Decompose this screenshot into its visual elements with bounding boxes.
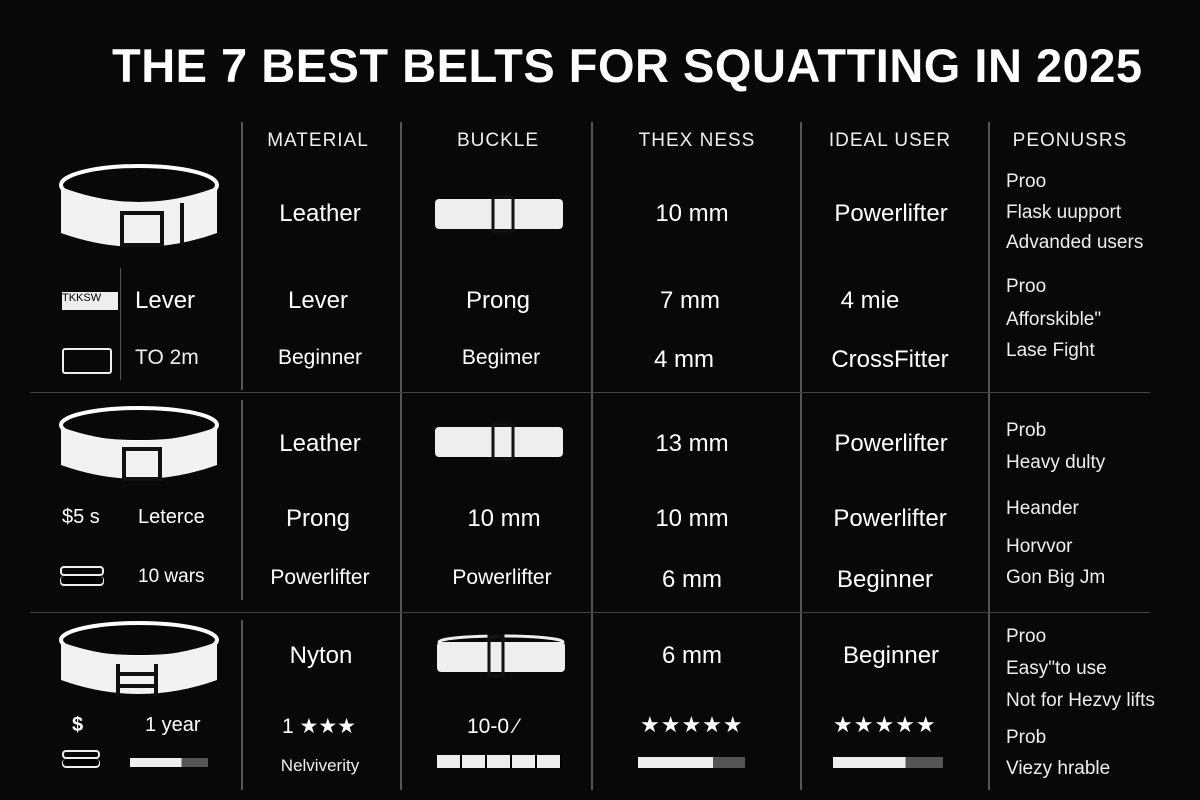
row 1 values xyxy=(62,171,1143,374)
row 1 values: TKKSW xyxy=(62,292,101,304)
text: Proo xyxy=(1006,171,1046,192)
row 3 values: 10-0 ⁄ xyxy=(467,715,518,738)
row 3 values: Beginner xyxy=(843,642,939,669)
row 2 values: Powerlifter xyxy=(452,566,552,589)
text: Proo xyxy=(1006,626,1046,647)
column headers: BUCKLE xyxy=(457,130,539,151)
row 1 values: Afforskible" xyxy=(1006,309,1101,330)
row 3 values: Viezy hrable xyxy=(1006,758,1110,779)
row 1 values: Lever xyxy=(135,287,195,314)
row 2 values: Heander xyxy=(1006,498,1079,519)
row 3 values: Not for Hezvy lifts xyxy=(1006,690,1155,711)
row 2 values: Heavy dulty xyxy=(1006,452,1105,473)
belt icon 3 xyxy=(59,621,219,696)
row 2 values: Prob xyxy=(1006,420,1046,441)
row 2 values: 6 mm xyxy=(662,566,722,593)
row 1 values: 10 mm xyxy=(655,200,729,227)
row 1 values: Prong xyxy=(466,287,530,314)
row 3 values: Nelviverity xyxy=(281,756,359,775)
row 2 values: Gon Big Jm xyxy=(1006,567,1105,588)
belt icon 1 xyxy=(59,164,219,247)
row 2 values: Powerlifter xyxy=(834,430,948,457)
row 3 values: ★★★★★ xyxy=(833,712,937,737)
row 2 values: Beginner xyxy=(837,566,933,593)
row 3 values: Nyton xyxy=(290,642,352,669)
column headers: IDEAL USER xyxy=(829,130,951,151)
row 2 values: 10 wars xyxy=(138,566,205,587)
row 2 values xyxy=(60,420,1106,593)
row 2 values: 10 mm xyxy=(467,505,541,532)
row 2 values: Horvvor xyxy=(1006,536,1073,557)
row 3 values: 1 year xyxy=(145,714,201,736)
row 1 values: Flask uupport xyxy=(1006,202,1121,223)
row 1 values: Powerlifter xyxy=(834,200,948,227)
row 3 values: 6 mm xyxy=(662,642,722,669)
row 3 values: 1 ★★★ xyxy=(282,715,356,738)
column headers xyxy=(267,130,1127,151)
column headers: PEONUSRS xyxy=(1013,130,1127,151)
column headers: THEX NESS xyxy=(639,130,755,151)
title: THE 7 BEST BELTS FOR SQUATTING IN 2025 xyxy=(112,39,1143,92)
row 2 values: Powerlifter xyxy=(270,566,370,589)
row 1 values: TO 2m xyxy=(135,346,199,369)
row 1 values: 4 mie xyxy=(841,287,899,314)
row 3 values: $ xyxy=(72,714,83,736)
row 2 values: Leterce xyxy=(138,506,205,528)
row 2 values: $5 s xyxy=(62,506,100,528)
row 2 values: Leather xyxy=(279,430,361,457)
row 2 values: 13 mm xyxy=(655,430,729,457)
row 3 values: Easy"to use xyxy=(1006,658,1107,679)
buckle icons xyxy=(435,196,563,232)
column headers: MATERIAL xyxy=(267,130,369,151)
belt icon 2 xyxy=(59,406,219,481)
row 3 values xyxy=(62,626,1155,779)
row 1 values: Beginner xyxy=(278,346,362,369)
row 1 values: Begimer xyxy=(462,346,540,369)
row 1 values: Lever xyxy=(288,287,348,314)
row 2 values: Prong xyxy=(286,505,350,532)
row 1 values: CrossFitter xyxy=(831,346,949,373)
row 1 values: Lase Fight xyxy=(1006,340,1095,361)
row 1 values: Leather xyxy=(279,200,361,227)
row 2 values: Powerlifter xyxy=(833,505,947,532)
row 2 values: 10 mm xyxy=(655,505,729,532)
row 1 values: Proo xyxy=(1006,276,1046,297)
row 1 values: Advanded users xyxy=(1006,232,1143,253)
row 3 values: ★★★★★ xyxy=(640,712,744,737)
row 1 values: 7 mm xyxy=(660,287,720,314)
row 3 values: Prob xyxy=(1006,727,1046,748)
row 1 values: 4 mm xyxy=(654,346,714,373)
